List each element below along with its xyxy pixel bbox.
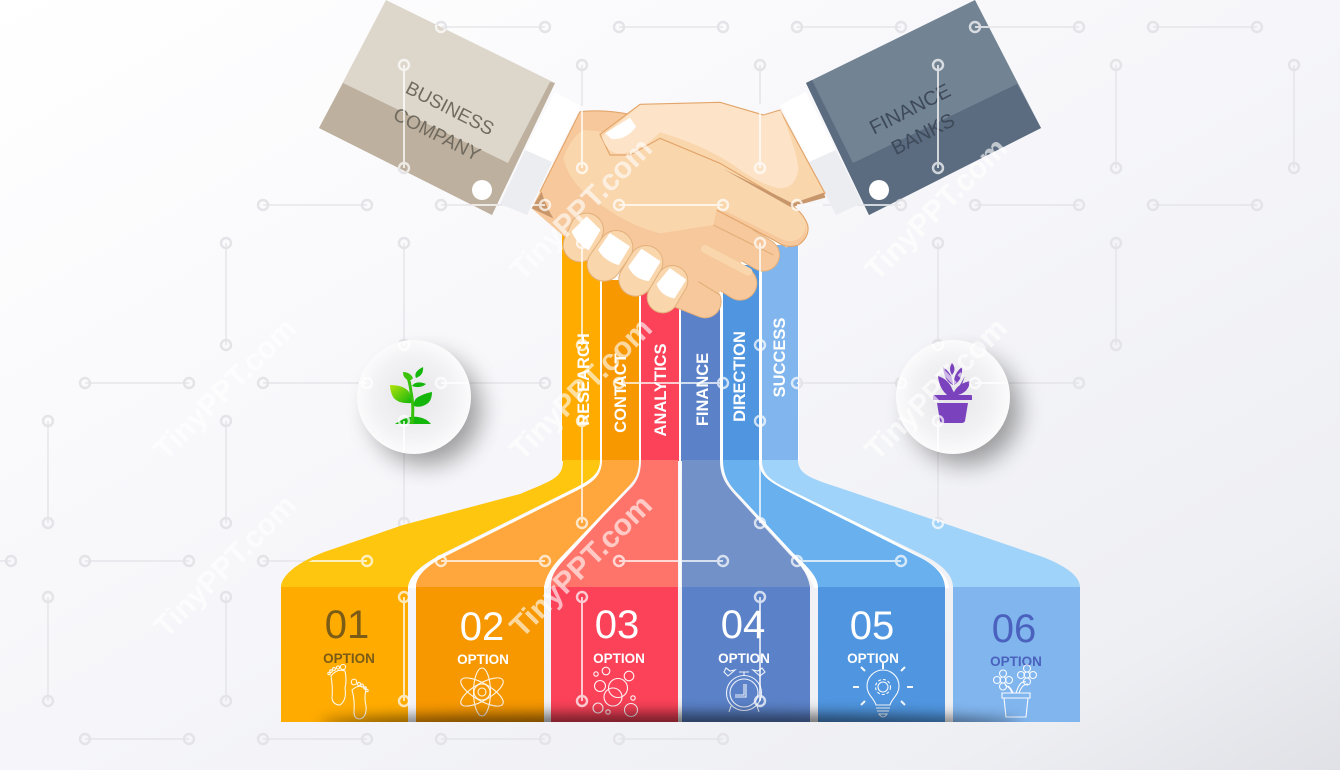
watermarks: TinyPPT.com — [859, 132, 1014, 287]
column 3 — [551, 290, 679, 722]
white gap underlay — [408, 240, 948, 587]
column 2 — [416, 280, 639, 722]
right hand lower fingers — [680, 225, 763, 302]
cuff — [780, 92, 836, 162]
column ribbons — [281, 235, 1080, 722]
watermarks: TinyPPT.com — [504, 132, 659, 287]
right hand top finger — [717, 163, 808, 246]
floor shadow on columns — [318, 703, 1022, 722]
brown wrist shade — [532, 192, 553, 218]
handshake illustration — [532, 102, 825, 305]
finger nails — [573, 218, 685, 297]
label OPTION 3: OPTION — [593, 651, 645, 666]
label OPTION 2: OPTION — [457, 652, 509, 667]
label OPTION 1: OPTION — [323, 651, 375, 666]
step number 01: 01 — [325, 603, 369, 647]
column 4 — [681, 300, 810, 722]
label OPTION 5: OPTION — [847, 651, 899, 666]
watermarks: TinyPPT.com — [859, 312, 1014, 467]
left sleeve: business company — [319, 0, 581, 215]
step number 06: 06 — [992, 607, 1036, 651]
right hand light area — [602, 103, 798, 188]
right disc with potted plant icon — [896, 340, 1020, 465]
vertical labels: SUCCESS — [771, 318, 789, 397]
watermarks: TinyPPT.com — [504, 489, 659, 644]
thumb nail — [605, 118, 636, 139]
sleeve text: FINANCE — [866, 80, 954, 139]
cuff — [525, 92, 581, 162]
vertical labels — [575, 318, 789, 436]
vertical labels: RESEARCH — [575, 333, 593, 426]
sleeve text: BUSINESS — [402, 78, 497, 140]
watermarks: TinyPPT.com — [148, 312, 303, 467]
column 6 — [762, 245, 1080, 722]
vertical labels: CONTACT — [612, 353, 630, 433]
watermarks — [148, 132, 1014, 644]
crease wedge — [723, 169, 825, 208]
step number 02: 02 — [460, 605, 504, 649]
sleeve text: BANKS — [888, 109, 958, 160]
vertical labels: ANALYTICS — [652, 344, 670, 436]
icon: atom — [457, 668, 507, 716]
icon: bubbles — [593, 667, 638, 716]
left disc with plant icon — [357, 340, 481, 465]
column 1 — [281, 235, 600, 722]
step number 03: 03 — [595, 603, 639, 647]
icon: alarm clock — [724, 668, 765, 712]
icon: footprints — [328, 664, 368, 719]
sleeve text — [390, 78, 497, 166]
right hand back and wrist — [600, 102, 825, 205]
finger highlight and creases — [705, 249, 748, 272]
step number 04: 04 — [721, 603, 765, 647]
icon: purple pot — [933, 363, 972, 423]
vertical labels: FINANCE — [694, 353, 712, 426]
icon: light bulb with gear — [853, 663, 913, 717]
watermarks: TinyPPT.com — [148, 489, 303, 644]
icon: green plant — [390, 367, 432, 424]
palm highlight — [563, 130, 807, 248]
sleeve text: COMPANY — [390, 104, 484, 166]
label OPTION 4: OPTION — [718, 651, 770, 666]
vertical labels: DIRECTION — [731, 331, 749, 422]
label OPTION 6: OPTION — [990, 654, 1042, 669]
step number 05: 05 — [850, 604, 894, 648]
icon: flower pot — [994, 665, 1036, 717]
column 5 — [723, 265, 945, 722]
watermarks: TinyPPT.com — [504, 312, 659, 467]
left hand fingers — [580, 230, 672, 297]
left wrist outline — [540, 111, 633, 192]
left hand base — [532, 111, 753, 305]
right sleeve: finance banks — [780, 0, 1041, 215]
grid overlay on objects — [308, 20, 1008, 708]
